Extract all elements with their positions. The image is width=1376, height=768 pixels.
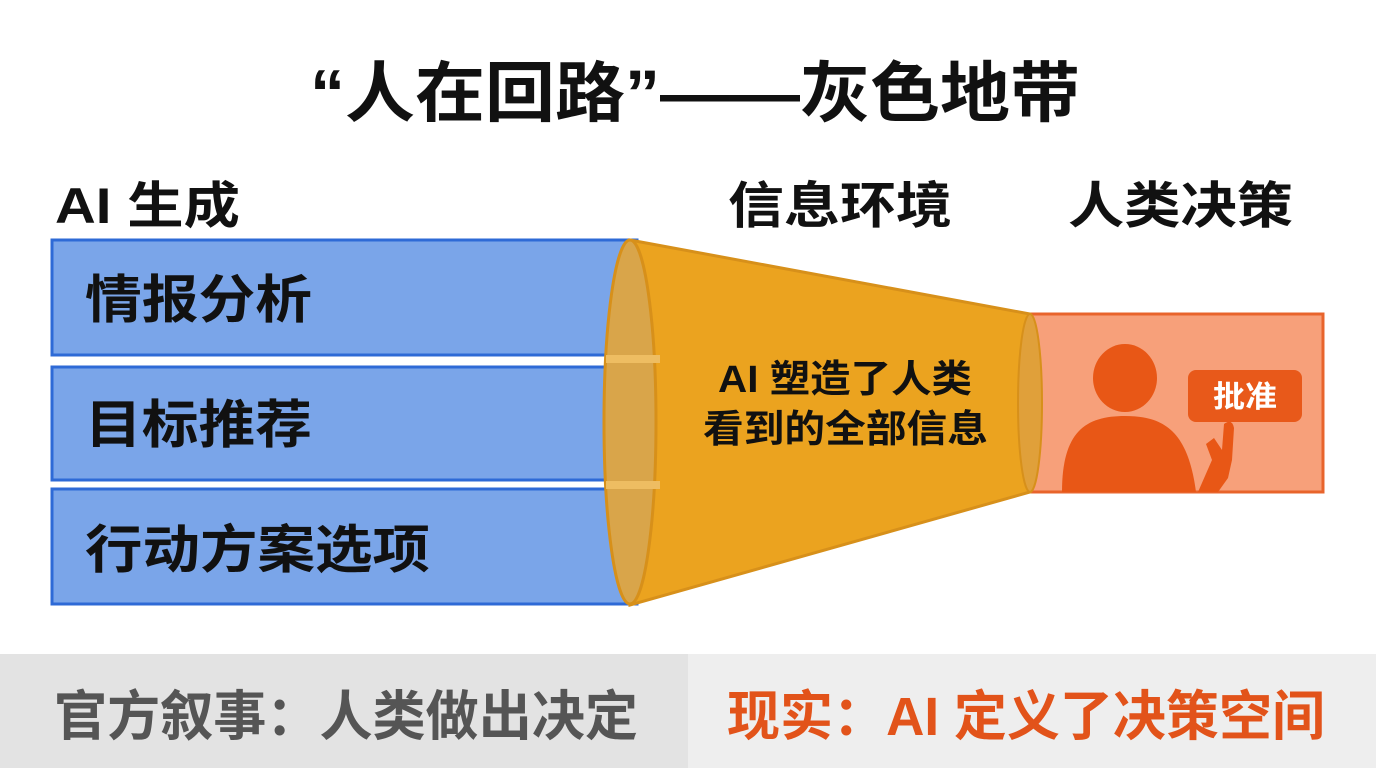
box: course of action options: 行动方案选项: [85, 522, 430, 580]
footer left: official narrative: 官方叙事：人类做出决定: [54, 687, 638, 747]
button: approve: [1188, 370, 1302, 422]
box: target recommendation: [52, 367, 637, 480]
footer left: official narrative: [0, 654, 688, 768]
box: intelligence analysis: 情报分析: [85, 272, 312, 330]
panel: AI outputs: [52, 240, 637, 604]
footer right: reality: 现实：AI 定义了决策空间: [727, 687, 1325, 747]
panel: human decision box: [1030, 314, 1323, 492]
header: info environment: 信息环境: [728, 178, 952, 234]
box: target recommendation: 目标推荐: [85, 397, 312, 455]
funnel: information environment: [604, 240, 1042, 605]
icon: person: [1062, 344, 1234, 492]
funnel text: AI 塑造了人类: [718, 359, 972, 401]
box: intelligence analysis: [52, 240, 637, 355]
button: approve: 批准: [1213, 381, 1277, 414]
funnel: information environment: 看到的全部信息: [703, 409, 988, 451]
title: “人在回路”——灰色地带: [310, 56, 1080, 130]
header: AI generation: AI 生成: [55, 178, 240, 234]
header: human decision: 人类决策: [1068, 178, 1293, 234]
footer right: reality: [688, 654, 1376, 768]
box: course of action options: [52, 489, 637, 604]
